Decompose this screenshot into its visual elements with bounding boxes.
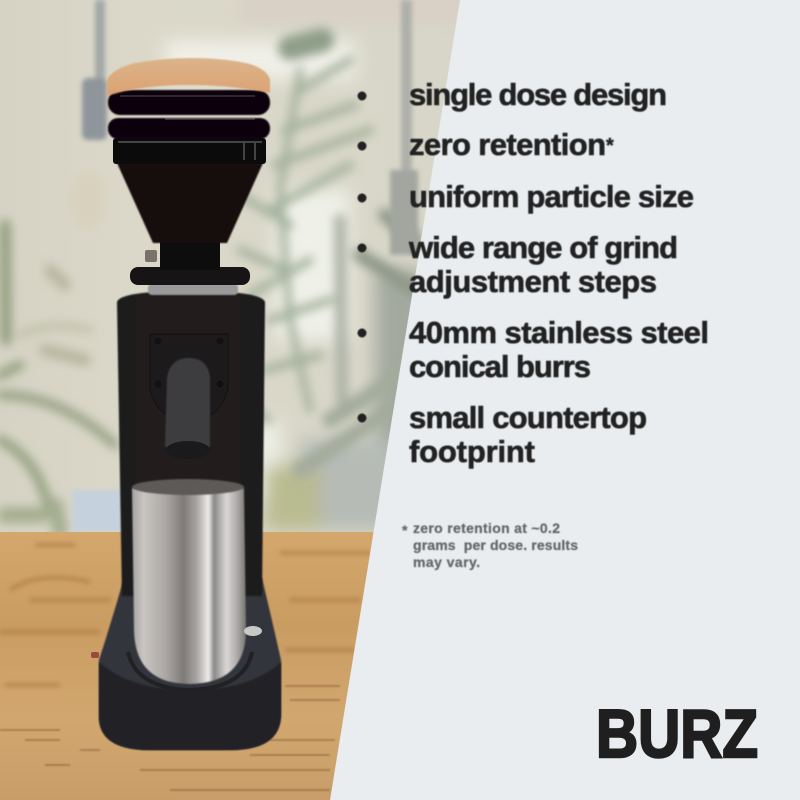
adjustment flange (130, 267, 250, 285)
bullet: grind adjustment: adjustment steps (409, 264, 657, 299)
bullet: small footprint: footprint (409, 434, 535, 469)
bullet: uniform particle size: uniform particle size (409, 179, 694, 214)
bullet: conical burrs: conical burrs (409, 349, 591, 384)
base button (244, 626, 262, 636)
grounds spout (165, 358, 210, 447)
feature list (358, 77, 709, 469)
pendant lamps (82, 0, 418, 255)
bullet: grind adjustment (358, 230, 678, 299)
footnote: may vary. (413, 554, 480, 570)
photo background: blurred room (0, 0, 480, 535)
side screw (145, 250, 157, 262)
wooden table (0, 532, 400, 800)
footnote: zero retention at ~0.2 (413, 520, 560, 536)
bullet: small footprint (358, 400, 647, 469)
footnote: grams per dose. results (413, 537, 578, 553)
black rings (108, 118, 270, 139)
bullet: conical burrs: 40mm stainless steel (409, 315, 709, 350)
light text panel (330, 0, 800, 800)
neck (160, 240, 220, 270)
body panel and screws (150, 334, 228, 415)
blue window (72, 490, 132, 532)
collar ring (148, 284, 238, 295)
pendant bulb (72, 170, 104, 230)
bullet: zero retention: * (606, 135, 614, 157)
brand logo: BURZ (596, 696, 758, 772)
footnote: * (402, 522, 408, 538)
bullet: zero retention: zero retention (409, 127, 606, 162)
bullet: conical burrs (358, 315, 709, 384)
power cable (266, 587, 363, 593)
blurred left plant (0, 225, 115, 530)
hopper funnel (117, 163, 263, 243)
grinder body (117, 291, 265, 596)
red pin (91, 652, 99, 658)
bullet: single dose design: single dose design (409, 77, 667, 112)
dock ring (128, 652, 252, 690)
hopper band (113, 138, 266, 164)
bullet: small footprint: small countertop (409, 400, 647, 435)
grinder base (99, 578, 281, 750)
bullet: grind adjustment: wide range of grind (408, 230, 678, 265)
footnote (402, 520, 578, 570)
base front band (99, 662, 281, 750)
wooden lid (107, 58, 270, 96)
coffee grinder (91, 58, 363, 750)
steel dosing cup (132, 488, 246, 684)
blurred palm fronds (235, 40, 415, 470)
